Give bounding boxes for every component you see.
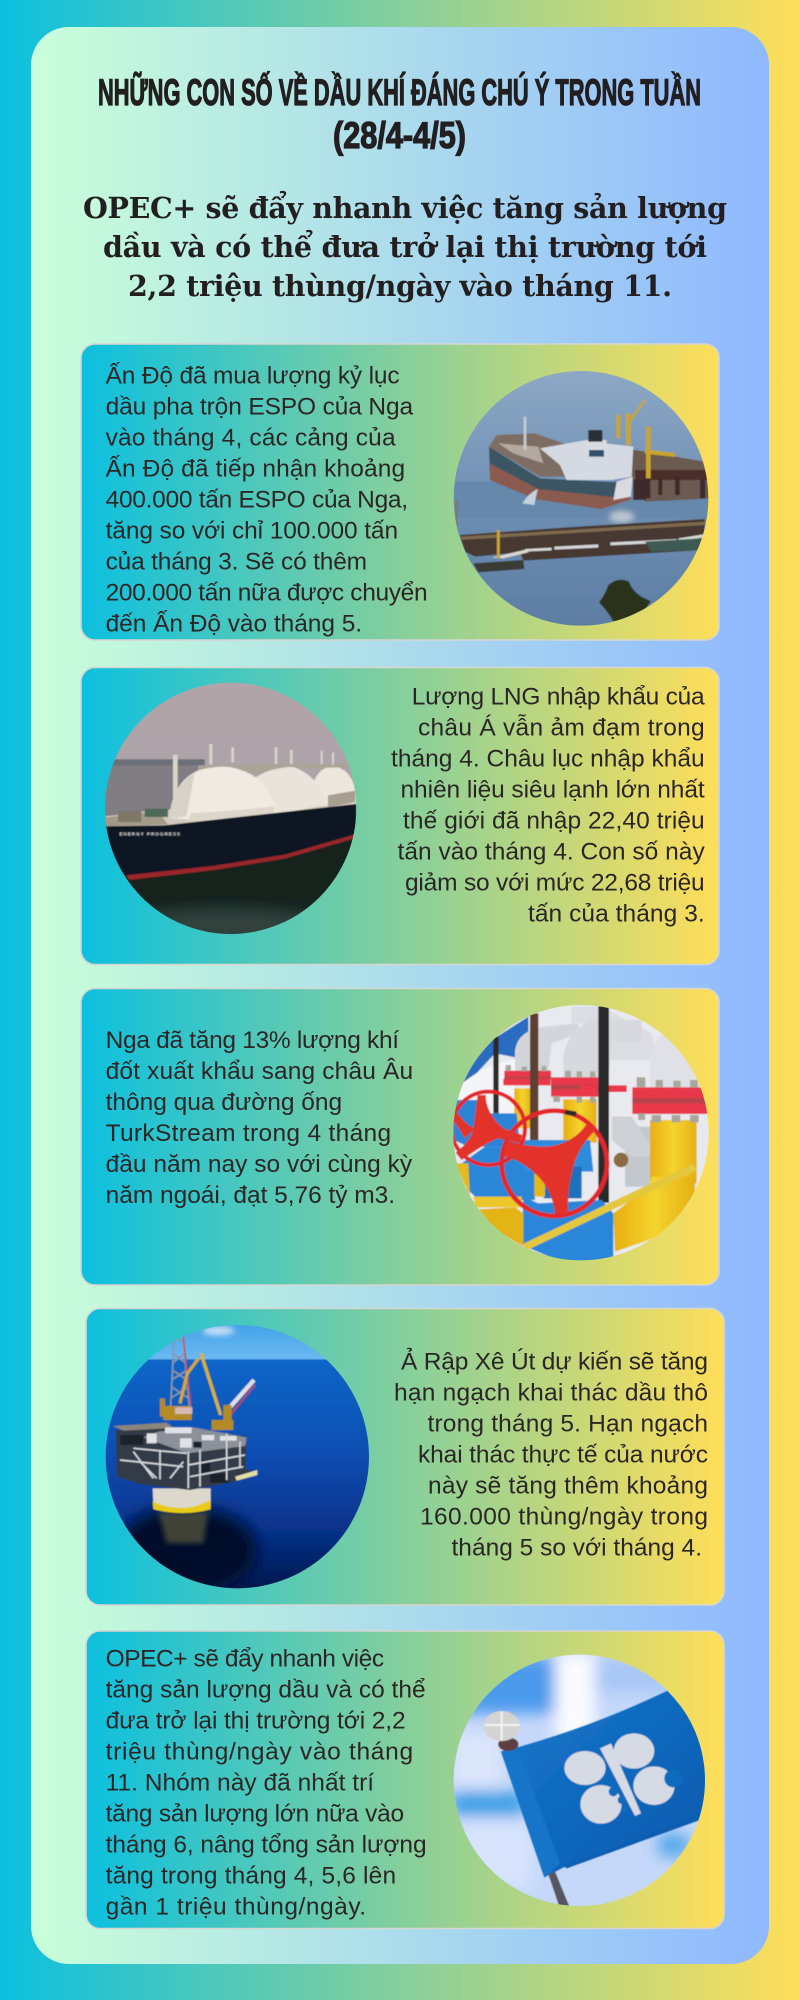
title <box>98 71 701 156</box>
text block: tháng 5 so với tháng 4. <box>452 1535 702 1562</box>
text block: tăng so với chỉ 100.000 tấn <box>106 517 398 544</box>
text block: đưa trở lại thị trường tới 2,2 <box>106 1708 406 1734</box>
panel: Russia TurkStream exports <box>81 988 719 1285</box>
text block: trong tháng 5. Hạn ngạch <box>428 1411 708 1438</box>
text block: triệu thùng/ngày vào tháng <box>106 1738 413 1766</box>
subtitle: dầu và có thể đưa trở lại thị trường tới <box>103 230 707 264</box>
text block <box>106 1027 413 1209</box>
text block: nhiên liệu siêu lạnh lớn nhất <box>400 776 705 803</box>
card background <box>81 344 719 640</box>
card background <box>81 668 719 964</box>
text block: đốt xuất khẩu sang châu Âu <box>106 1058 413 1085</box>
panel: India ESPO imports <box>81 344 719 640</box>
text block: 400.000 tấn ESPO của Nga, <box>106 486 408 513</box>
text block: 200.000 tấn nữa được chuyển <box>106 579 428 606</box>
text block: đầu năm nay so với cùng kỳ <box>106 1151 413 1178</box>
text block: Ả Rập Xê Út dự kiến sẽ tăng <box>401 1347 708 1376</box>
text block: TurkStream trong 4 tháng <box>106 1120 391 1147</box>
text block: Nga đã tăng 13% lượng khí <box>106 1027 399 1054</box>
text block: thế giới đã nhập 22,40 triệu <box>403 807 705 834</box>
text block: Ấn Độ đã tiếp nhận khoảng <box>106 454 405 482</box>
card background <box>81 988 719 1285</box>
image: OPEC flag <box>454 1654 705 1906</box>
text block: tăng trong tháng 4, 5,6 lên <box>106 1862 396 1890</box>
text block <box>391 683 705 927</box>
card background <box>86 1308 724 1605</box>
panel: Saudi Arabia quota <box>86 1308 724 1605</box>
text block: tăng sản lượng lớn nữa vào <box>106 1800 404 1828</box>
text block: OPEC+ sẽ đẩy nhanh việc <box>106 1646 384 1672</box>
text block: tấn vào tháng 4. Con số này <box>398 838 705 865</box>
subtitle: 2,2 triệu thùng/ngày vào tháng 11. <box>128 269 672 303</box>
text block: dầu pha trộn ESPO của Nga <box>106 393 413 420</box>
text block: gần 1 triệu thùng/ngày. <box>106 1894 366 1920</box>
image: oil tanker at port <box>454 371 708 626</box>
panel: OPEC+ output <box>86 1631 724 1928</box>
ship name: ENERGY PROGRESS <box>119 831 180 836</box>
text block: tấn của tháng 3. <box>528 900 705 927</box>
text block: 160.000 thùng/ngày trong <box>420 1504 708 1531</box>
card background <box>86 1631 724 1928</box>
text block: tháng 6, nâng tổng sản lượng <box>106 1832 427 1858</box>
image: offshore oil platform <box>100 1320 375 1593</box>
text block: hạn ngạch khai thác dầu thô <box>394 1380 708 1407</box>
text block: Lượng LNG nhập khẩu của <box>412 683 705 710</box>
panel: Asia LNG imports <box>81 668 719 964</box>
text block: châu Á vẫn ảm đạm trong <box>418 714 705 741</box>
subtitle <box>83 191 727 303</box>
image: gas pipeline valves <box>453 1005 709 1260</box>
text block: khai thác thực tế của nước <box>418 1442 708 1469</box>
text block: thông qua đường ống <box>106 1089 342 1116</box>
text block: 11. Nhóm này đã nhất trí <box>106 1770 374 1796</box>
text block: này sẽ tăng thêm khoảng <box>428 1473 708 1500</box>
text block: tăng sản lượng dầu và có thể <box>106 1676 426 1704</box>
text block: giảm so với mức 22,68 triệu <box>405 869 705 896</box>
text block <box>106 1646 427 1920</box>
text block: tháng 4. Châu lục nhập khẩu <box>391 745 705 772</box>
text block: của tháng 3. Sẽ có thêm <box>106 548 367 575</box>
text block: năm ngoái, đạt 5,76 tỷ m3. <box>106 1182 395 1209</box>
text block: Ấn Độ đã mua lượng kỷ lục <box>106 361 400 389</box>
title: (28/4-4/5) <box>333 114 466 156</box>
text block <box>394 1347 708 1562</box>
text block: vào tháng 4, các cảng của <box>106 424 396 451</box>
image: LNG carrier <box>105 682 356 934</box>
text block: đến Ấn Độ vào tháng 5. <box>106 609 362 637</box>
subtitle: OPEC+ sẽ đẩy nhanh việc tăng sản lượng <box>83 191 727 225</box>
text block <box>106 361 428 637</box>
